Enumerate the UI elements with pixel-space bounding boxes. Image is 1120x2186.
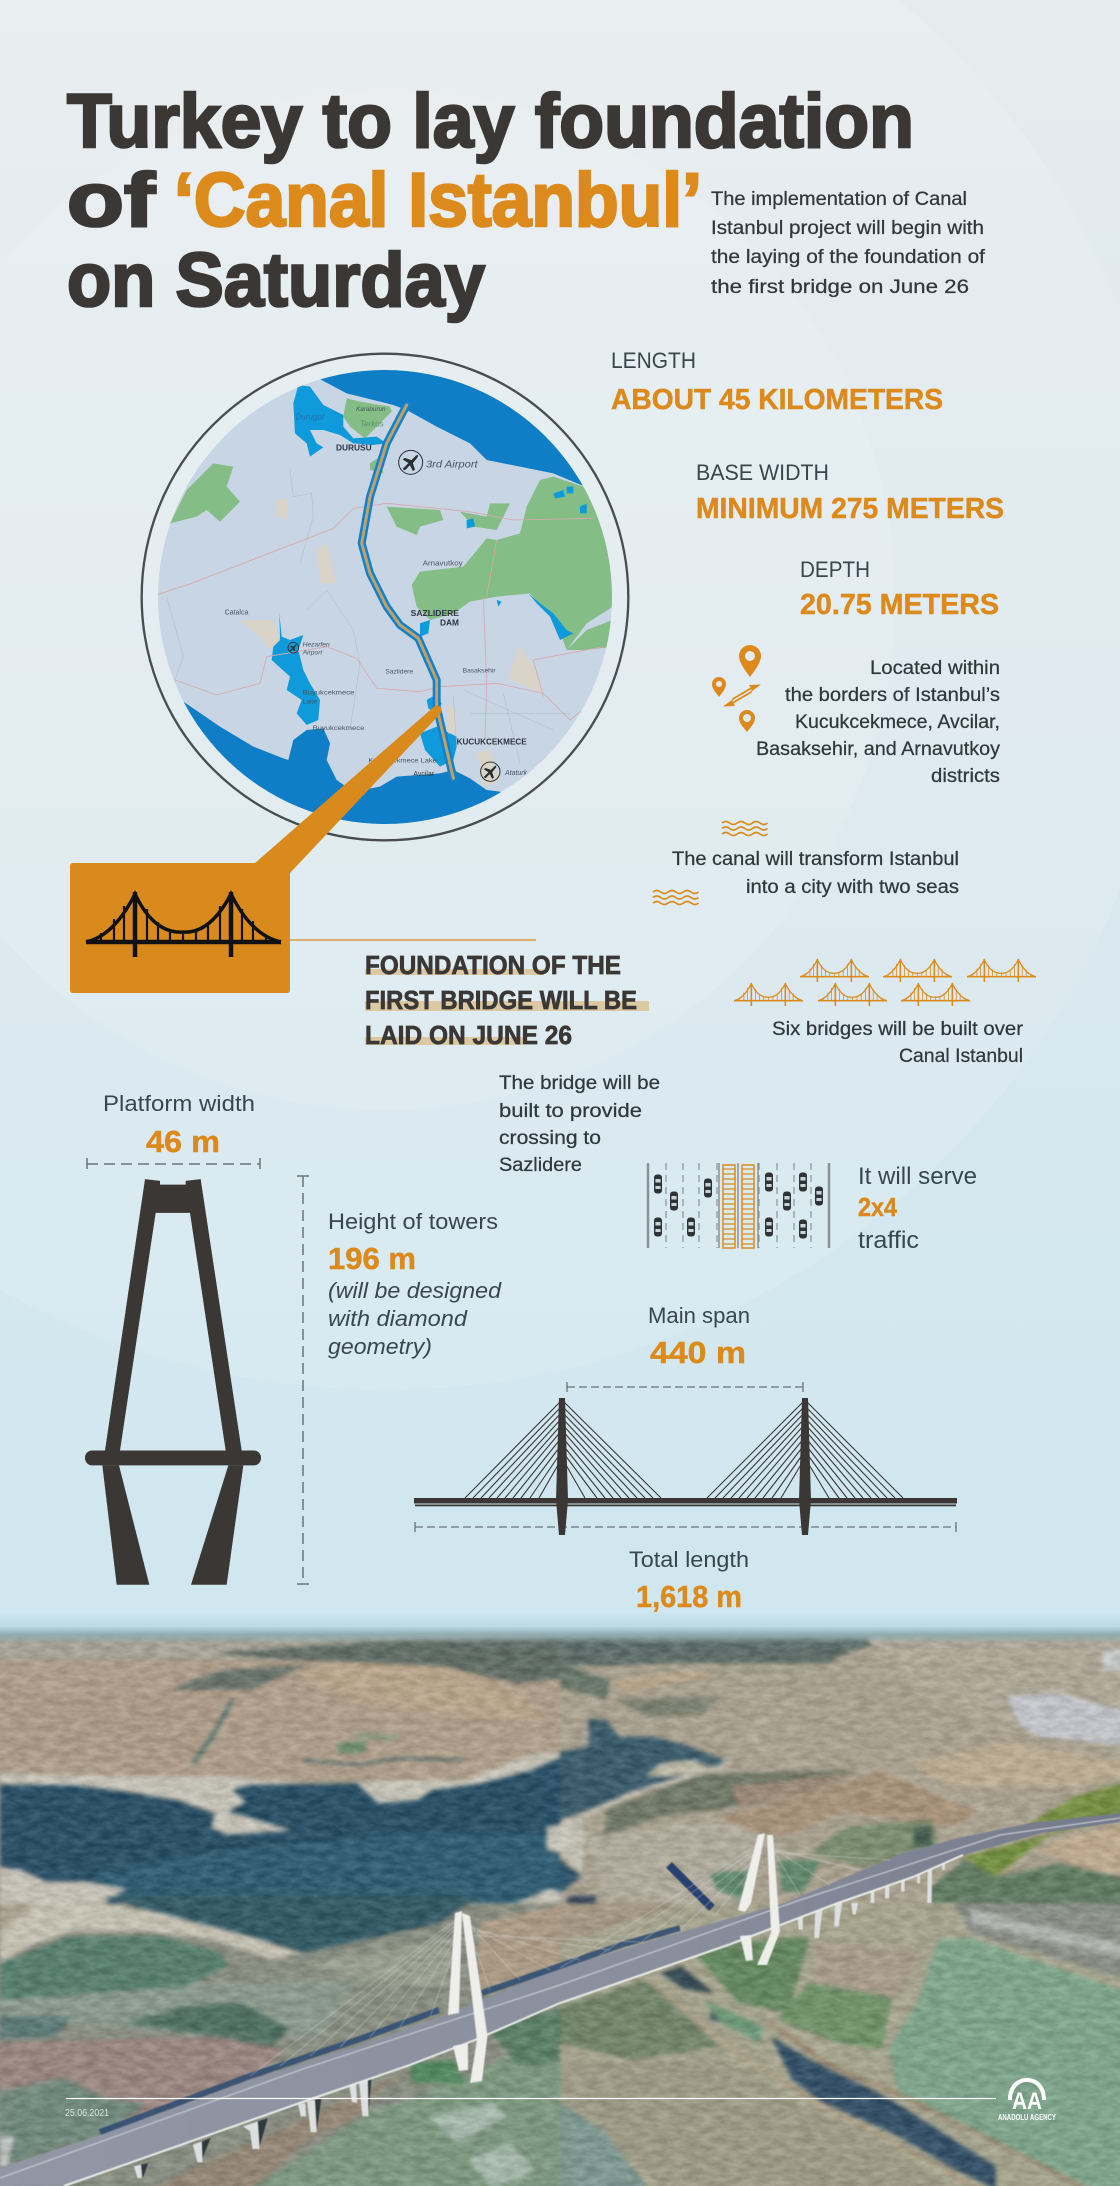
label: total length: Total length (629, 1547, 749, 1572)
dimension: tower height (297, 1176, 309, 1584)
stat: depth (800, 557, 999, 621)
intro text: the laying of the foundation of (711, 247, 986, 268)
intro text: the first bridge on June 26 (711, 277, 969, 298)
text: bridge crossing: built to provide (499, 1101, 642, 1122)
map: place labels: Lake (303, 698, 317, 705)
stat: base width: MINIMUM 275 METERS (696, 493, 1004, 525)
map: urban patches (240, 498, 543, 787)
title (67, 79, 914, 323)
icon: road with lanes and cars (648, 1163, 829, 1248)
text: location districts: districts (931, 766, 1000, 787)
text: location districts: Located within (870, 658, 1000, 679)
icon: waves top (722, 822, 768, 836)
map: place labels: Buyukcekmece (313, 725, 365, 732)
dimension: platform width (87, 1158, 260, 1170)
aerial illustration of the bridge and the reservoir (0, 1612, 1120, 2186)
text: location districts (756, 658, 1001, 787)
heading: foundation of the first bridge: FIRST BRIDGE WILL BE (365, 987, 637, 1015)
map: lakes (272, 385, 587, 767)
text: location districts: Kucukcekmece, Avcilar, (795, 712, 1000, 733)
map: forests (170, 457, 613, 650)
icon: location pins with arrow (712, 645, 761, 732)
label: platform width: Platform width (103, 1091, 255, 1116)
title: on Saturday (67, 238, 485, 323)
map: place labels: KUCUKCEKMECE (457, 736, 527, 746)
map: place labels: Karaburun (356, 406, 386, 413)
icon: suspension bridge (86, 892, 281, 957)
map: place labels: Arnavutkoy (423, 560, 463, 567)
map: place labels: SAZLIDERE (411, 608, 459, 618)
map: sea (184, 370, 583, 824)
map: place labels: Sazlidere (385, 669, 413, 676)
title: Turkey to lay foundation (67, 79, 914, 164)
footer rule (66, 2098, 996, 2100)
map: Terkos lake land (343, 398, 392, 438)
side elevation of cable-stayed bridge (414, 1382, 957, 1535)
icons: six small bridges (734, 959, 1036, 1006)
stat: length: ABOUT 45 KILOMETERS (611, 384, 943, 416)
label: main span: 440 m (650, 1335, 746, 1370)
text: six bridges: Six bridges will be built over (772, 1019, 1024, 1040)
stat: base width (696, 460, 1004, 525)
label: platform width (103, 1091, 255, 1159)
logo: Anadolu Agency: ANADOLU AGENCY (998, 2112, 1056, 2122)
text: height of towers: geometry) (328, 1334, 432, 1359)
stat: depth: 20.75 METERS (800, 589, 999, 621)
logo: Anadolu Agency (998, 2078, 1056, 2122)
callout: orange bridge box with pointer (70, 705, 441, 993)
text: traffic: It will serve (858, 1163, 977, 1190)
map (142, 347, 628, 863)
date: 25.06.2021 (65, 2107, 109, 2119)
tower one (448, 1911, 488, 2083)
text: traffic (858, 1163, 977, 1254)
horizon haze (0, 1617, 1120, 1643)
text: bridge crossing (499, 1073, 660, 1176)
stat: length: LENGTH (611, 348, 696, 373)
tower two (738, 1833, 780, 1965)
map: place labels: Buyukcekmece (303, 690, 355, 697)
intro text: Istanbul project will begin with (711, 218, 984, 239)
text: bridge crossing: The bridge will be (499, 1073, 660, 1094)
terrain mottling texture (0, 1630, 1120, 2186)
text: location districts: the borders of Istanbul’s (785, 685, 1000, 706)
map: place labels: Durugol (296, 412, 324, 421)
logo: Anadolu Agency: AA (1012, 2088, 1042, 2115)
label: main span: Main span (648, 1303, 750, 1328)
text: six bridges: Canal Istanbul (899, 1046, 1023, 1067)
map: place labels: 3rd Airport (426, 459, 479, 470)
map: place labels: Kucukcekmece Lake (368, 757, 437, 764)
intro text (711, 189, 986, 298)
text: traffic: traffic (858, 1227, 919, 1254)
text: height of towers: (will be designed (328, 1278, 502, 1303)
map: place labels: Terkos (360, 420, 384, 429)
map: place labels: Airport (302, 649, 323, 656)
text: bridge crossing: Sazlidere (499, 1155, 582, 1176)
map: place labels: DURUSU (336, 442, 372, 452)
map: place labels: DAM (440, 617, 459, 627)
heading: foundation of the first bridge: LAID ON JUNE 26 (365, 1022, 572, 1050)
text: height of towers (328, 1209, 502, 1359)
deck (0, 1813, 1120, 2186)
heading: foundation of the first bridge (365, 952, 649, 1050)
text: height of towers: with diamond (328, 1306, 468, 1331)
title: of (67, 158, 156, 243)
label: main span (648, 1303, 750, 1370)
terrain painting (0, 1625, 1120, 2186)
text: bridge crossing: crossing to (499, 1128, 601, 1149)
label: platform width: 46 m (146, 1124, 220, 1159)
map: place labels: Avcilar (413, 771, 435, 778)
intro text: The implementation of Canal (711, 189, 967, 210)
text: location districts: Basaksehir, and Arnavutkoy (756, 739, 1001, 760)
title: ‘Canal Istanbul’ (174, 158, 702, 243)
heading: foundation of the first bridge: FOUNDATION OF THE (365, 952, 621, 980)
text: two seas: into a city with two seas (746, 877, 959, 898)
label: total length (629, 1547, 749, 1614)
map: place labels: Basaksehir (463, 667, 496, 674)
stat: length (611, 348, 943, 416)
stay cables (250, 1842, 890, 2076)
divider line (290, 939, 536, 941)
map: place labels: Hezarfen (303, 642, 330, 649)
icon: waves bottom (653, 890, 699, 904)
stat: base width: BASE WIDTH (696, 460, 829, 485)
text: height of towers: Height of towers (328, 1209, 498, 1234)
text: traffic: 2x4 (858, 1192, 897, 1222)
map: place labels: Ataturk (504, 770, 528, 777)
text: two seas: The canal will transform Istanbul (672, 849, 959, 870)
text: height of towers: 196 m (328, 1241, 416, 1276)
stat: depth: DEPTH (800, 557, 870, 582)
cable shadow (100, 1928, 680, 2132)
text: two seas (672, 849, 959, 898)
tower shadow on ground (669, 1865, 712, 1908)
map: place labels (225, 406, 528, 778)
tower elevation drawing (85, 1179, 261, 1585)
text: six bridges (772, 1019, 1024, 1067)
map: place labels: Catalca (225, 610, 248, 617)
map: canal route (362, 405, 453, 778)
map: airports (288, 450, 500, 781)
bridge model (0, 1813, 1120, 2186)
map: roads (158, 503, 603, 740)
label: total length: 1,618 m (636, 1579, 742, 1614)
